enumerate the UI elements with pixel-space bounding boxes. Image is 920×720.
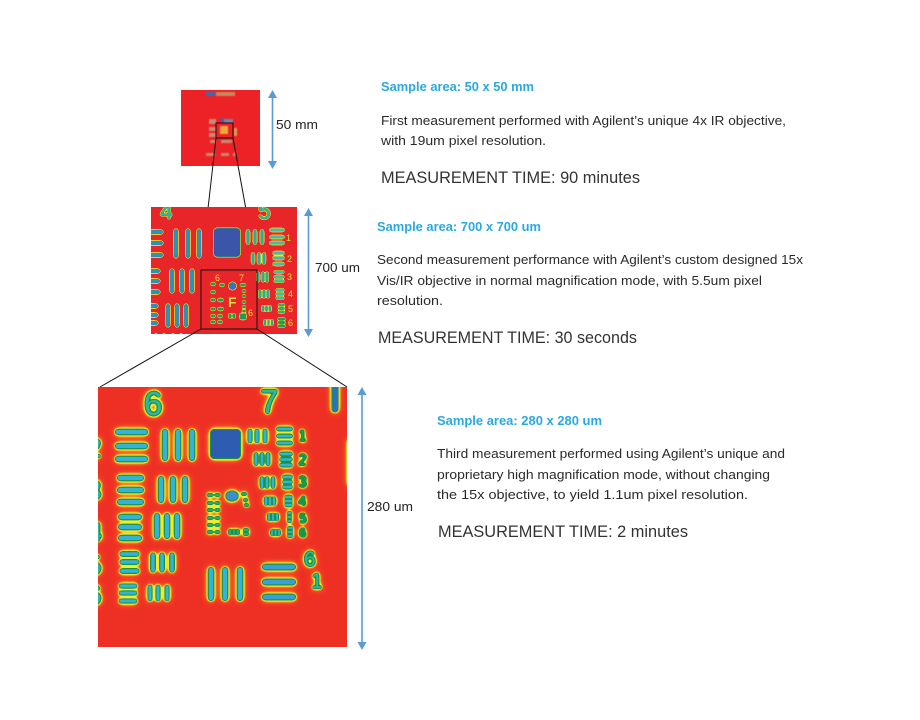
test pattern bars: 4: [298, 493, 306, 510]
test pattern bars: [148, 198, 284, 334]
sample test pattern: [206, 118, 237, 156]
scale digits: 2: [287, 254, 292, 264]
test pattern bars: 7: [260, 383, 278, 420]
text block: second measurement: [377, 220, 804, 347]
panel: 280 um sample image: [87, 380, 350, 647]
test pattern bars: 5: [258, 198, 271, 224]
heading: Sample area: 700 x 700 um: [377, 220, 541, 234]
measurement time: MEASUREMENT TIME: 30 seconds: [378, 328, 637, 347]
scale digits: 6: [248, 308, 253, 318]
zoom lines from first to second image: [201, 138, 257, 270]
description: the 15x objective, to yield 1.1um pixel resolution.: [437, 488, 748, 502]
description: [377, 253, 804, 308]
scale digits: 3: [287, 272, 292, 282]
description: [380, 114, 786, 148]
scale digits: 5: [288, 304, 293, 314]
measurement time: MEASUREMENT TIME: 90 minutes: [381, 168, 640, 187]
label: 280 um: 280 um: [367, 500, 413, 514]
test pattern bars: [87, 380, 350, 610]
description: Second measurement performance with Agilent’s custom designed 15x: [377, 253, 804, 267]
test pattern bars: 6: [299, 525, 306, 540]
description: with 19um pixel resolution.: [380, 134, 546, 148]
scale digits: [215, 233, 293, 328]
scale digits: 4: [288, 289, 293, 299]
arrow: 280 um dimension: [358, 387, 366, 650]
inset box: [216, 123, 233, 138]
scale digits: 6: [288, 318, 293, 328]
test pattern bars: 2: [298, 452, 307, 469]
scale digits: 6: [215, 273, 220, 283]
test pattern bars: 6: [304, 548, 316, 571]
test pattern bars: 1: [311, 570, 323, 593]
text block: third measurement: [437, 414, 785, 541]
test pattern bars: 2: [87, 433, 101, 463]
scale digits: 7: [239, 273, 244, 283]
inset box: [201, 270, 257, 329]
heading: Sample area: 50 x 50 mm: [381, 80, 534, 94]
panel: 700 um sample image: [148, 198, 297, 334]
description: Vis/IR objective in normal magnification mode, with 5.5um pixel: [377, 274, 762, 288]
description: proprietary high magnification mode, without changing: [437, 468, 770, 482]
top marking on sample: [206, 92, 235, 96]
measurement time: MEASUREMENT TIME: 2 minutes: [438, 522, 688, 541]
description: [437, 447, 785, 502]
scale digits: 1: [286, 233, 291, 243]
arrow: 50 mm dimension: [268, 90, 277, 169]
test pattern bars: 5: [299, 510, 307, 526]
test pattern bars: 1: [298, 428, 307, 445]
heading: Sample area: 280 x 280 um: [437, 414, 602, 428]
test pattern bars: 4: [160, 198, 173, 224]
test pattern bars: 4: [88, 517, 102, 547]
arrow: 700 um dimension: [304, 208, 313, 337]
test pattern bars: 5: [87, 550, 101, 580]
description: resolution.: [377, 294, 443, 308]
test pattern bars: 6: [144, 385, 162, 422]
scale digits: F: [228, 294, 237, 310]
test pattern bars: 3: [298, 474, 307, 491]
label: 700 um: 700 um: [315, 261, 360, 275]
test pattern bars: 6: [87, 580, 101, 610]
text block: first measurement: [380, 80, 786, 187]
description: Third measurement performed using Agilent’s unique and: [437, 447, 785, 461]
zoom lines from second to third image: [100, 329, 347, 387]
label: 50 mm: 50 mm: [276, 118, 318, 132]
test pattern bars: 3: [87, 475, 101, 505]
description: First measurement performed with Agilent’s unique 4x IR objective,: [381, 114, 786, 128]
panel: 50 mm sample image: [181, 90, 260, 166]
